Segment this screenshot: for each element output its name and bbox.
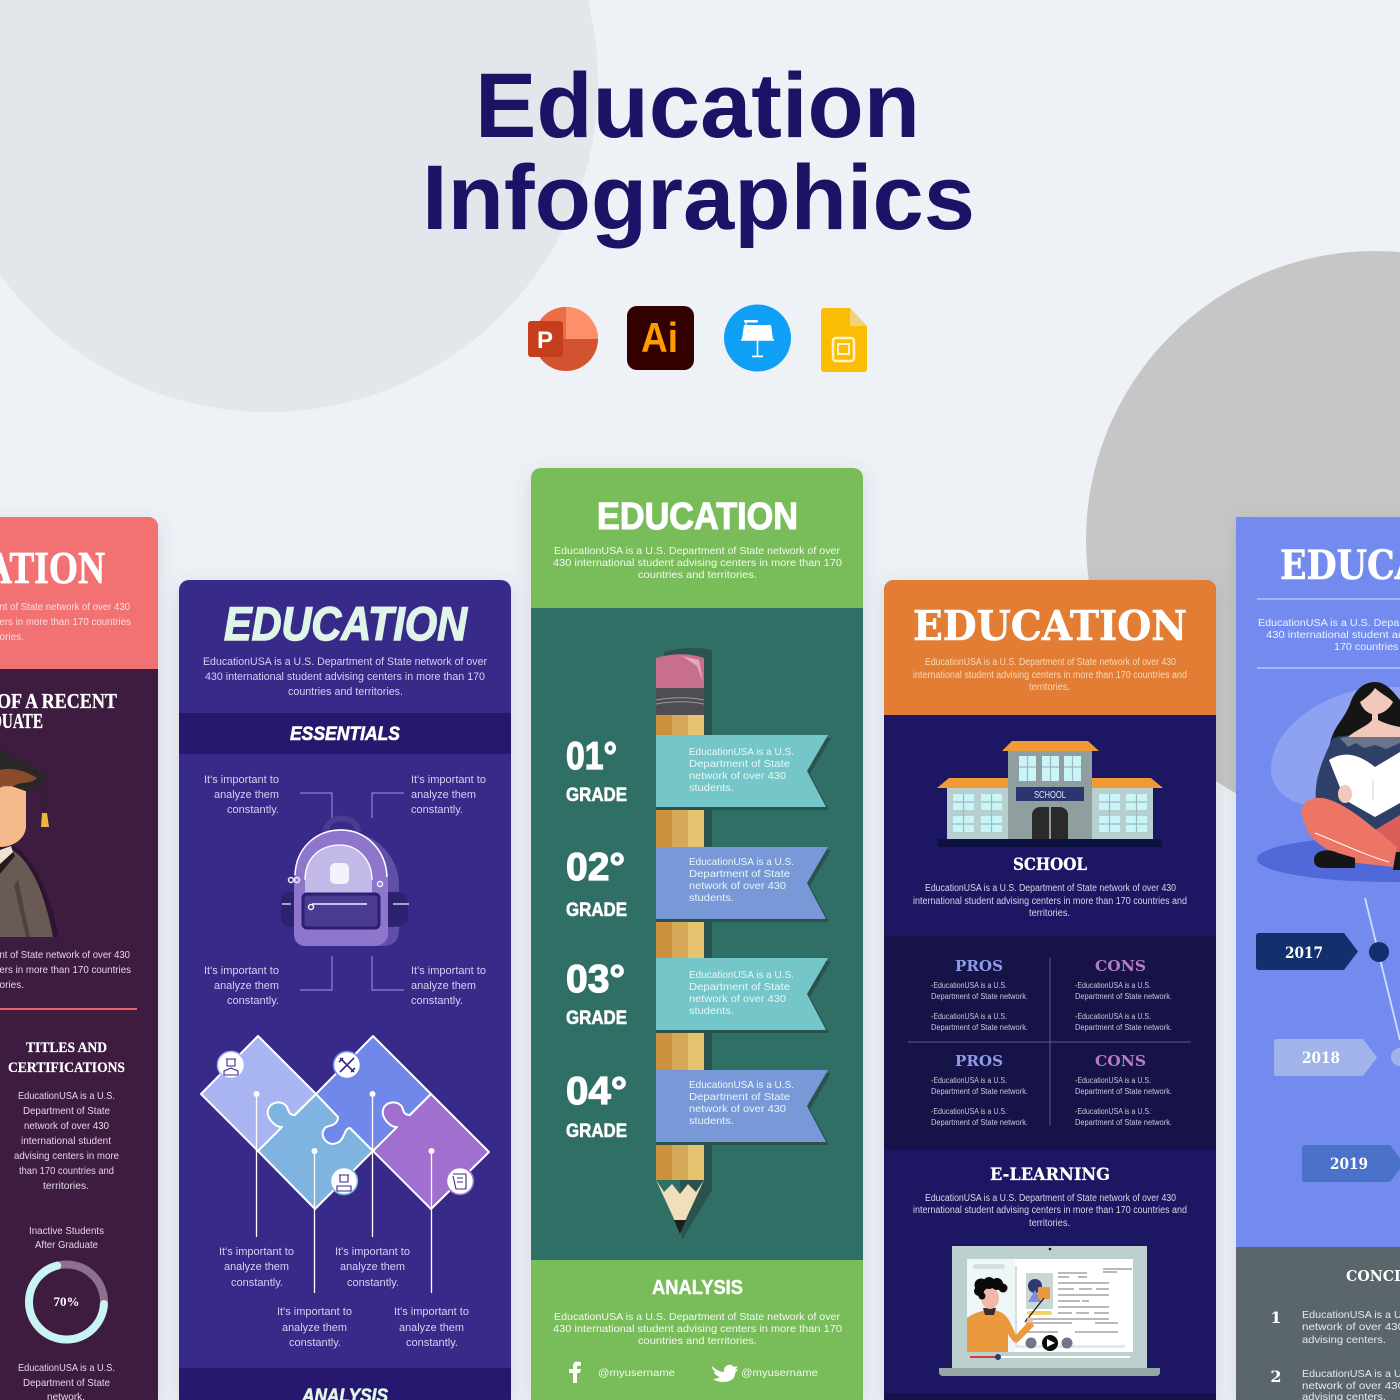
text: puzzle labels: It's important to xyxy=(394,1306,469,1318)
panel: grade pencil card xyxy=(531,468,863,1400)
text: cons block 1: CONS xyxy=(1095,957,1146,975)
text: twitter handle: @myusername xyxy=(741,1367,818,1379)
illustration: school building: SCHOOL xyxy=(1034,790,1066,801)
icon: Illustrator xyxy=(627,306,694,370)
text: conclusion item 1: advising centers. xyxy=(1302,1334,1386,1346)
heading: orange card title: EDUCATION xyxy=(913,602,1187,650)
chart: 70% donut xyxy=(27,1263,106,1341)
text: puzzle labels: It's important to xyxy=(335,1246,410,1258)
heading: school: SCHOOL xyxy=(1013,855,1087,874)
callout: grade 03: Department of State xyxy=(689,981,790,993)
text: certifications description: than 170 countries and xyxy=(19,1165,114,1177)
text: pros block 1 xyxy=(931,957,1028,1032)
text: green card analysis copy xyxy=(553,1311,842,1347)
text: green card analysis copy: 430 international student advising centers in more than 170 xyxy=(553,1323,842,1335)
software icons xyxy=(528,304,867,372)
text: backpack bottom-left label: analyze them xyxy=(214,980,279,992)
callout: grade 01: students. xyxy=(689,782,734,794)
heading: titles and certifications: TITLES AND xyxy=(26,1040,107,1056)
text: cons block 1: Department of State network. xyxy=(1075,1023,1172,1032)
text: grade labels: GRADE xyxy=(566,1008,627,1029)
heading: essentials: ESSENTIALS xyxy=(290,724,400,745)
text: pros block 2: PROS xyxy=(955,1052,1003,1070)
title: Education xyxy=(475,55,920,157)
title xyxy=(422,55,975,249)
text: donut label xyxy=(29,1225,104,1251)
text: conclusion item 2: 2 xyxy=(1270,1367,1282,1386)
panel: timeline card (right) xyxy=(1236,517,1400,1400)
panel: graduate card (left) xyxy=(0,517,158,1400)
text: cons block 1: -EducationUSA is a U.S. xyxy=(1075,1012,1151,1021)
callout: grade 02: network of over 430 xyxy=(689,880,786,892)
text: e-learning description: EducationUSA is a U.S. Department of State network of over 430 xyxy=(925,1193,1176,1204)
callout: grade 04: network of over 430 xyxy=(689,1103,786,1115)
heading: titles and certifications xyxy=(8,1040,125,1076)
text: pros block 2 xyxy=(931,1052,1028,1127)
text: backpack bottom-right label: It's important to xyxy=(411,965,486,977)
text: backpack bottom-left label: constantly. xyxy=(227,995,279,1007)
heading: green card title: EDUCATION xyxy=(597,496,798,538)
title: Infographics xyxy=(422,147,975,249)
text: certifications description: international student xyxy=(21,1135,111,1147)
icon: facebook xyxy=(569,1362,581,1383)
text: donut label: After Graduate xyxy=(35,1239,98,1251)
callout: grade 03: EducationUSA is a U.S. xyxy=(689,969,794,981)
text: pros block 2: Department of State network. xyxy=(931,1087,1028,1096)
text: backpack bottom-right label xyxy=(411,965,486,1007)
icon: documents badge xyxy=(446,1168,474,1194)
label: 2017 xyxy=(1256,933,1358,970)
callout: grade 02: students. xyxy=(689,892,734,904)
text: pros block 2: Department of State network. xyxy=(931,1118,1028,1127)
text: orange card intro: territories. xyxy=(1029,682,1070,693)
text: cons block 2: Department of State network. xyxy=(1075,1118,1172,1127)
text: donut note xyxy=(18,1362,115,1400)
text: puzzle labels: constantly. xyxy=(231,1277,283,1289)
icon: PowerPoint: P xyxy=(537,327,553,354)
icon: Keynote xyxy=(724,304,791,372)
text: certifications description xyxy=(14,1090,119,1192)
text: pros block 1: -EducationUSA is a U.S. xyxy=(931,1012,1007,1021)
text: backpack bottom-left label: It's important to xyxy=(204,965,279,977)
text: orange card intro: international student advising centers in more than 170 countries and xyxy=(913,670,1187,681)
text: puzzle labels: constantly. xyxy=(289,1337,341,1349)
text: puzzle labels: constantly. xyxy=(347,1277,399,1289)
text: cons block 2: Department of State network. xyxy=(1075,1087,1172,1096)
text: cons block 2: -EducationUSA is a U.S. xyxy=(1075,1076,1151,1085)
text: backpack top-right label: It's important to xyxy=(411,774,486,786)
text: puzzle labels: analyze them xyxy=(282,1322,347,1334)
callout: grade 04: Department of State xyxy=(689,1091,790,1103)
text: green card analysis copy: EducationUSA is a U.S. Department of State network of over xyxy=(554,1311,841,1323)
text: puzzle labels: constantly. xyxy=(406,1337,458,1349)
text: backpack top-left label: analyze them xyxy=(214,789,279,801)
heading: purple card title: EDUCATION xyxy=(224,597,468,650)
text: backpack bottom-right label: analyze them xyxy=(411,980,476,992)
text: backpack bottom-left label xyxy=(204,965,279,1007)
text: donut label: Inactive Students xyxy=(29,1225,104,1237)
panel: essentials card xyxy=(179,580,511,1400)
text: puzzle labels: analyze them xyxy=(224,1261,289,1273)
chart: timeline xyxy=(1256,898,1400,1182)
heading: green card analysis: ANALYSIS xyxy=(652,1277,743,1299)
text: donut note: Department of State xyxy=(23,1377,110,1389)
text: green card analysis copy: countries and territories. xyxy=(638,1335,757,1347)
text: school description xyxy=(913,883,1187,919)
text: e-learning description xyxy=(913,1193,1187,1229)
callout: grade 03: network of over 430 xyxy=(689,993,786,1005)
illustration: graduate xyxy=(0,748,59,937)
heading: profile xyxy=(0,689,117,733)
text: conclusion item 1: 1 xyxy=(1270,1308,1282,1327)
callout: grade 01: EducationUSA is a U.S. xyxy=(689,746,794,758)
callout: grade 04: EducationUSA is a U.S. xyxy=(689,1079,794,1091)
text: grade labels: GRADE xyxy=(566,785,627,806)
text: puzzle labels: analyze them xyxy=(340,1261,405,1273)
text: certifications description: EducationUSA is a U.S. xyxy=(18,1090,115,1102)
icon: Illustrator: Ai xyxy=(641,314,678,361)
text: cons block 2: CONS xyxy=(1095,1052,1146,1070)
text: green card intro xyxy=(553,545,842,581)
text: puzzle labels: It's important to xyxy=(219,1246,294,1258)
text: green card intro: EducationUSA is a U.S. Department of State network of over xyxy=(554,545,841,557)
text: cons block 1 xyxy=(1075,957,1172,1032)
text: school description: EducationUSA is a U.S. Department of State network of over 430 xyxy=(925,883,1176,894)
text: backpack top-right label: constantly. xyxy=(411,804,463,816)
text: backpack bottom-right label: constantly. xyxy=(411,995,463,1007)
text: purple card intro: 430 international student advising centers in more than 170 xyxy=(205,671,485,683)
callout: grade 03: students. xyxy=(689,1005,734,1017)
text: cons block 1: Department of State network. xyxy=(1075,992,1172,1001)
illustration: school building xyxy=(937,741,1163,847)
text: puzzle labels: analyze them xyxy=(399,1322,464,1334)
text: purple card intro: countries and territories. xyxy=(288,686,403,698)
text: puzzle labels xyxy=(219,1246,469,1349)
text: cons block 2 xyxy=(1075,1052,1172,1127)
text: pros block 1: Department of State network. xyxy=(931,992,1028,1001)
text: coral card intro xyxy=(0,601,131,643)
text: backpack top-right label: analyze them xyxy=(411,789,476,801)
callout: grade 04: students. xyxy=(689,1115,734,1127)
label: 2019 xyxy=(1302,1145,1400,1182)
text: purple card intro: EducationUSA is a U.S. Department of State network of over xyxy=(203,656,487,668)
label: 2019: 2019 xyxy=(1330,1154,1368,1173)
callout: grade 01: Department of State xyxy=(689,758,790,770)
text: grade labels: GRADE xyxy=(566,1121,627,1142)
icon: teacher badge xyxy=(218,1052,244,1078)
panel: school card xyxy=(884,580,1216,1400)
callout: grade 03 xyxy=(656,958,831,1033)
illustration: girl reading xyxy=(1257,682,1400,882)
icon: student badge xyxy=(330,1168,358,1194)
text: donut note: EducationUSA is a U.S. xyxy=(18,1362,115,1374)
text: puzzle labels: It's important to xyxy=(277,1306,352,1318)
text: cons block 2: -EducationUSA is a U.S. xyxy=(1075,1107,1151,1116)
text: certifications description: territories. xyxy=(43,1180,89,1192)
text: purple card intro xyxy=(203,656,487,698)
text: e-learning description: territories. xyxy=(1029,1218,1070,1229)
text: green card intro: 430 international student advising centers in more than 170 xyxy=(553,557,842,569)
text: graduate description xyxy=(0,949,131,991)
callout: grade 01 xyxy=(656,735,831,810)
text: backpack top-right label xyxy=(411,774,486,816)
text: blue card intro xyxy=(1258,617,1400,653)
text: cons block 1: -EducationUSA is a U.S. xyxy=(1075,981,1151,990)
heading: e-learning: E-LEARNING xyxy=(990,1165,1110,1184)
text: green card intro: countries and territories. xyxy=(638,569,757,581)
text: orange card intro: EducationUSA is a U.S. Department of State network of over 430 xyxy=(925,657,1176,668)
illustration: laptop lesson xyxy=(939,1246,1160,1376)
callout: grade 02 xyxy=(656,847,831,922)
icon: PowerPoint xyxy=(528,307,598,371)
icon: tools badge xyxy=(334,1052,360,1078)
label: 2018 xyxy=(1274,1039,1377,1076)
icon: twitter xyxy=(712,1365,738,1382)
text: grade labels xyxy=(566,735,627,1142)
icon: Google Slides xyxy=(821,308,867,372)
text: pros block 1: -EducationUSA is a U.S. xyxy=(931,981,1007,990)
text: certifications description: advising centers in more xyxy=(14,1150,119,1162)
text: grade labels: 04° xyxy=(566,1070,627,1113)
text: orange card intro xyxy=(913,657,1187,693)
text: conclusion item 1 xyxy=(1270,1308,1400,1346)
text: pros block 1: Department of State network. xyxy=(931,1023,1028,1032)
label: 2018: 2018 xyxy=(1302,1048,1340,1067)
text: school description: international student advising centers in more than 170 countries and xyxy=(913,896,1187,907)
text: grade labels: 02° xyxy=(566,846,625,889)
chart: puzzle diagram xyxy=(201,1036,489,1293)
text: backpack top-left label: It's important to xyxy=(204,774,279,786)
text: certifications description: network of over 430 xyxy=(24,1120,109,1132)
text: grade labels: 03° xyxy=(566,958,625,1001)
callout: grade 04 xyxy=(656,1070,831,1145)
text: grade labels: GRADE xyxy=(566,900,627,921)
text: facebook handle: @myusername xyxy=(598,1367,675,1379)
text: conclusion item 2 xyxy=(1270,1367,1400,1400)
callout: grade 01: network of over 430 xyxy=(689,770,786,782)
text: school description: territories. xyxy=(1029,908,1070,919)
text: backpack top-left label: constantly. xyxy=(227,804,279,816)
text: pros block 1: PROS xyxy=(955,957,1003,975)
chart: 70% donut: 70% xyxy=(54,1294,80,1309)
callout: grade 02: Department of State xyxy=(689,868,790,880)
text: e-learning description: international student advising centers in more than 170 countries and xyxy=(913,1205,1187,1216)
callout: grade 02: EducationUSA is a U.S. xyxy=(689,856,794,868)
text: backpack top-left label xyxy=(204,774,279,816)
label: 2017: 2017 xyxy=(1285,943,1323,962)
illustration: pencil xyxy=(656,648,712,1240)
text: pros block 2: -EducationUSA is a U.S. xyxy=(931,1107,1007,1116)
text: grade labels: 01° xyxy=(566,735,617,778)
text: certifications description: Department of State xyxy=(23,1105,110,1117)
heading: titles and certifications: CERTIFICATIONS xyxy=(8,1060,125,1076)
text: pros block 2: -EducationUSA is a U.S. xyxy=(931,1076,1007,1085)
illustration: backpack xyxy=(281,818,409,946)
